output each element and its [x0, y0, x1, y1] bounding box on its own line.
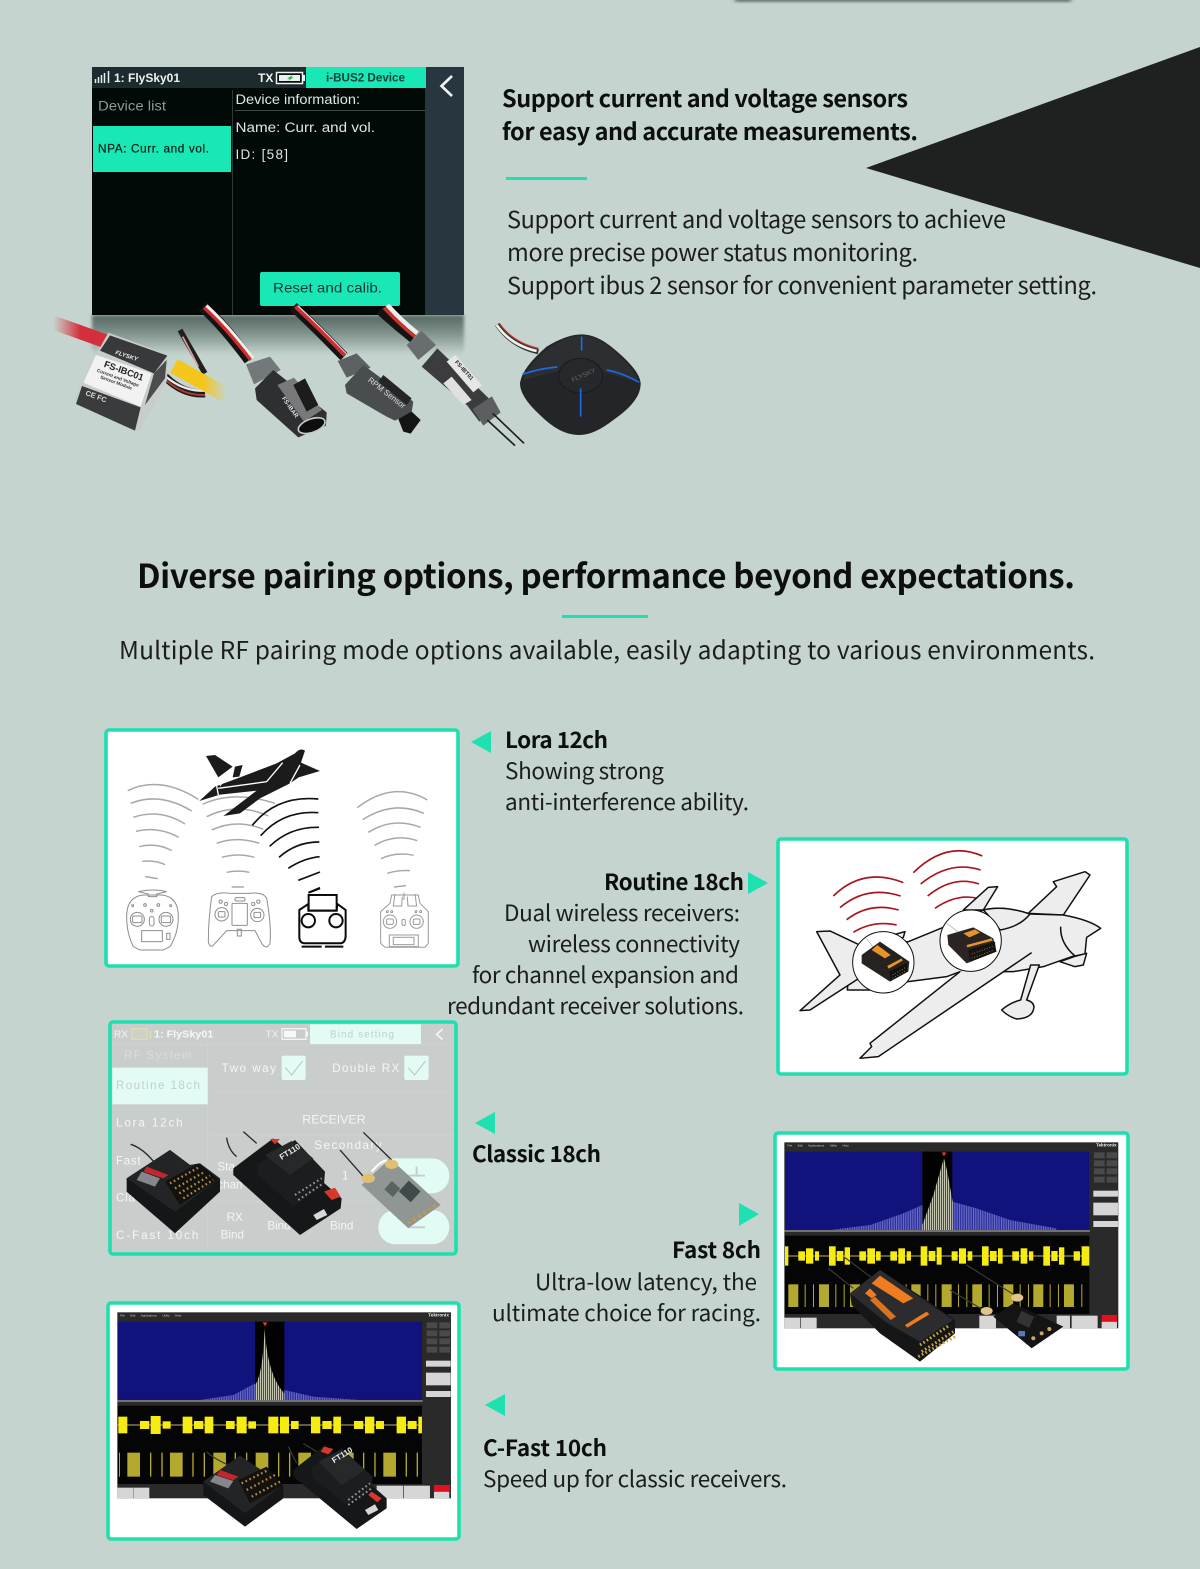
sensor 4: temperature module: FS-IBT01 — [453, 360, 474, 382]
scope side buttons — [117, 1322, 451, 1498]
antennas — [828, 1258, 1013, 1311]
icon: controller 4 — [381, 893, 428, 947]
scope body — [784, 1142, 1118, 1328]
panel: Classic 18ch illustration — [110, 1022, 456, 1254]
label: C-Fast 10ch — [483, 1431, 787, 1494]
Fast description line 1: Ultra-low latency, the — [535, 1265, 757, 1297]
label: Lora 12ch: Lora 12ch — [505, 723, 608, 755]
antennas — [207, 1443, 317, 1465]
model name: 1: FlySky01 — [154, 1029, 214, 1040]
label: C-Fast 10ch: C-Fast 10ch — [483, 1431, 607, 1463]
spectrum centre band — [255, 1322, 284, 1400]
signal bars icon — [96, 71, 108, 83]
arrow: Lora 12ch — [471, 731, 491, 753]
centre trace — [118, 1423, 422, 1426]
antennas — [131, 1132, 392, 1178]
Routine description line 1: Dual wireless receivers: — [504, 896, 740, 928]
detail circle right with receiver — [940, 910, 1001, 971]
secondary column label: Secondary — [314, 1139, 382, 1152]
channel value: 1 — [342, 1169, 348, 1182]
screen side panel — [425, 67, 464, 315]
TX label: TX — [258, 71, 273, 85]
arrow: Classic 18ch — [475, 1112, 495, 1134]
icon: controller 1 — [127, 890, 178, 950]
status text RX: RX — [114, 1029, 128, 1040]
receiver: stacked black — [293, 1445, 387, 1529]
Fast row label: Fast — [116, 1154, 141, 1167]
receiver heading: RECEIVER — [302, 1114, 366, 1127]
section subtitle: Multiple RF pairing mode options available, easily adapting to various environments. — [119, 632, 1095, 667]
text block: sensor description: Support current and voltage sensors to achieve — [507, 201, 1006, 235]
bind setting label: Bind setting — [330, 1030, 394, 1041]
double RX option: Double RX — [332, 1062, 400, 1075]
C-Fast row label: C-Fast 10ch — [116, 1229, 198, 1242]
peak marker — [263, 1322, 267, 1326]
double RX checkbox — [404, 1056, 429, 1080]
lower trace bars — [788, 1284, 1082, 1307]
C-Fast description: Speed up for classic receivers. — [483, 1462, 787, 1494]
bind button B: Bind — [330, 1220, 353, 1233]
label: Routine 18ch: Routine 18ch — [604, 865, 744, 897]
label: Fast 8ch: Fast 8ch — [672, 1233, 761, 1265]
two way option: Two way — [222, 1062, 276, 1075]
list selected row — [93, 126, 231, 172]
receiver: small black PCB — [981, 1294, 1063, 1348]
minus pill — [378, 1210, 449, 1244]
arrow: C-Fast 10ch — [485, 1394, 505, 1416]
peak marker — [942, 1152, 946, 1156]
column divider — [232, 90, 233, 315]
panel frame — [108, 1303, 459, 1539]
receiver: stacked black: FT110 — [278, 1142, 302, 1162]
sensor 1: current and voltage module: FLYSKY — [114, 350, 139, 363]
RX bind label — [221, 1211, 244, 1241]
scope brand: Tektronix — [428, 1313, 449, 1318]
aeroplane outline — [800, 872, 1101, 1058]
warning box — [132, 1029, 147, 1039]
Routine description line 4: redundant receiver solutions. — [447, 989, 744, 1021]
battery — [282, 1029, 308, 1039]
list row label: NPA: Curr. and vol. — [98, 142, 209, 156]
receiver: stacked black: FT110 — [330, 1445, 355, 1465]
tab: i-BUS2 Device — [306, 67, 426, 88]
spectrum centre band — [922, 1152, 952, 1230]
dark triangle decoration — [866, 47, 1200, 268]
device information title: Device information: — [236, 92, 360, 107]
screen drop shadow — [92, 315, 464, 355]
TX label: TX — [266, 1029, 279, 1040]
Fast description line 2: ultimate choice for racing. — [492, 1296, 761, 1328]
arrow: Fast 8ch — [739, 1203, 759, 1226]
label: Classic 18ch: Classic 18ch — [472, 1137, 601, 1169]
arrow: Routine 18ch — [748, 872, 768, 894]
battery icon — [276, 72, 305, 84]
plus pill — [378, 1158, 449, 1193]
label: Lora 12ch — [505, 723, 749, 817]
bind button A: Bind — [267, 1220, 291, 1233]
panel: C-Fast 10ch oscilloscope — [108, 1303, 459, 1539]
spectrum noise floor — [200, 1383, 360, 1400]
faded screen panels — [112, 1044, 453, 1248]
detail circle left with receiver — [853, 932, 914, 993]
panel: device information screen — [92, 67, 464, 355]
stop button — [1102, 1315, 1117, 1321]
receiver: stacked black — [233, 1138, 342, 1235]
section title: Diverse pairing options, performance beyond expectations. — [137, 550, 1075, 598]
channel label: chan — [217, 1178, 243, 1191]
sensor 2: altitude module — [203, 306, 371, 437]
waveform view — [785, 1236, 1089, 1314]
sensors row — [53, 305, 641, 446]
routine row label: Routine 18ch — [116, 1079, 200, 1092]
warning mark: ! — [149, 1029, 152, 1041]
Classic row label: Cla — [116, 1192, 135, 1205]
id line: ID: [58] — [236, 147, 288, 162]
sensor 1: current and voltage module: CE FC — [84, 388, 109, 405]
screen header bar — [92, 67, 425, 88]
Lora row label: Lora 12ch — [116, 1117, 183, 1130]
sensor 2: altitude module: FS-IBAR — [280, 396, 299, 420]
scope divider — [784, 1229, 1090, 1232]
routine row highlight — [112, 1068, 208, 1104]
heading: support sensors — [502, 80, 918, 147]
two way checkbox — [282, 1056, 306, 1080]
panel frame — [106, 730, 458, 966]
sensor 1: current and voltage module: FS-IBC01 — [103, 359, 145, 383]
start channel label: Sta — [217, 1160, 235, 1173]
Lora description line 1: Showing strong — [505, 754, 664, 786]
signal arcs, grey — [128, 785, 427, 887]
label: Fast 8ch — [492, 1233, 761, 1328]
heading: support sensors: Support current and voltage sensors — [502, 80, 908, 114]
icon: controller 2 — [208, 893, 270, 947]
scope menu: File Edit Applications Utility Help — [787, 1143, 849, 1147]
panel: Fast 8ch oscilloscope — [775, 1133, 1128, 1369]
stop button — [434, 1485, 450, 1491]
scope menu: File Edit Applications Utility Help — [120, 1313, 182, 1317]
back chevron — [442, 76, 452, 96]
Lora description line 2: anti-interference ability. — [505, 785, 749, 817]
receiver: orange FT series — [850, 1270, 955, 1362]
signal arcs, black — [252, 799, 320, 893]
panel: Lora 12ch illustration — [106, 730, 458, 966]
panel frame — [775, 1133, 1128, 1369]
sensor 1: current and voltage module: Sensor Module — [100, 375, 133, 391]
spectrum view — [118, 1322, 422, 1400]
lower trace bars — [119, 1453, 418, 1477]
sensor 4: temperature module — [380, 305, 524, 446]
tab label: i-BUS2 Device — [326, 72, 405, 84]
Routine description line 2: wireless connectivity — [528, 927, 740, 959]
device list heading: Device list — [98, 98, 166, 114]
RF System heading: RF System — [124, 1049, 192, 1062]
sensor 1: current and voltage module — [53, 323, 227, 431]
icon: jet aircraft — [199, 749, 320, 816]
GPS module with lead — [497, 323, 641, 435]
yellow burst bars — [118, 1416, 422, 1434]
scope brand: Tektronix — [1096, 1143, 1117, 1148]
scope divider — [117, 1399, 423, 1402]
GPS module with lead: FLYSKY — [571, 367, 597, 384]
sensor 3: RPM module: RPM Sensor — [366, 375, 408, 411]
receiver: compact black — [203, 1456, 283, 1527]
description line three: Support ibus 2 sensor for convenient parameter setting. — [507, 267, 1097, 301]
divider under section title — [562, 615, 648, 618]
reset button label: Reset and calib. — [273, 280, 382, 296]
text block: sensor description — [507, 201, 1097, 301]
sensor 3: RPM module — [345, 365, 421, 434]
waveform view — [118, 1406, 422, 1484]
receiver: bare PCB — [362, 1158, 441, 1228]
spectrum peak — [922, 1158, 953, 1230]
receiver: compact black — [127, 1150, 220, 1233]
RX bind label: RX — [227, 1211, 243, 1224]
panel: Routine 18ch illustration — [778, 839, 1127, 1074]
label: Routine 18ch — [447, 865, 744, 1021]
heading rule — [235, 110, 425, 111]
panel frame — [778, 839, 1127, 1074]
spectrum peak — [255, 1328, 284, 1400]
panel frame — [110, 1022, 456, 1254]
back chevron — [437, 1029, 443, 1040]
yellow burst bars — [785, 1246, 1089, 1266]
shadow bar at top edge — [735, 0, 1071, 1]
centre trace — [785, 1254, 1089, 1257]
model name: 1: FlySky01 — [114, 71, 180, 85]
spectrum side lobes — [830, 1202, 1057, 1230]
scope body — [117, 1312, 451, 1498]
sensor 1: current and voltage module: Current and Voltage — [96, 368, 140, 388]
bind setting tab — [310, 1024, 421, 1044]
RX bind label: Bind — [221, 1228, 244, 1241]
spectrum view — [785, 1152, 1089, 1230]
Routine description line 3: for channel expansion and — [472, 958, 739, 990]
scope side buttons — [784, 1152, 1118, 1328]
divider under sensor heading — [506, 177, 587, 180]
signal arcs, red — [833, 851, 982, 932]
reset button — [260, 272, 400, 306]
screen body — [92, 67, 464, 315]
icon: controller 3 highlighted — [299, 888, 346, 947]
heading line two: for easy and accurate measurements. — [502, 113, 918, 147]
name line: Name: Curr. and vol. — [236, 120, 375, 135]
description line two: more precise power status monitoring. — [507, 234, 918, 268]
